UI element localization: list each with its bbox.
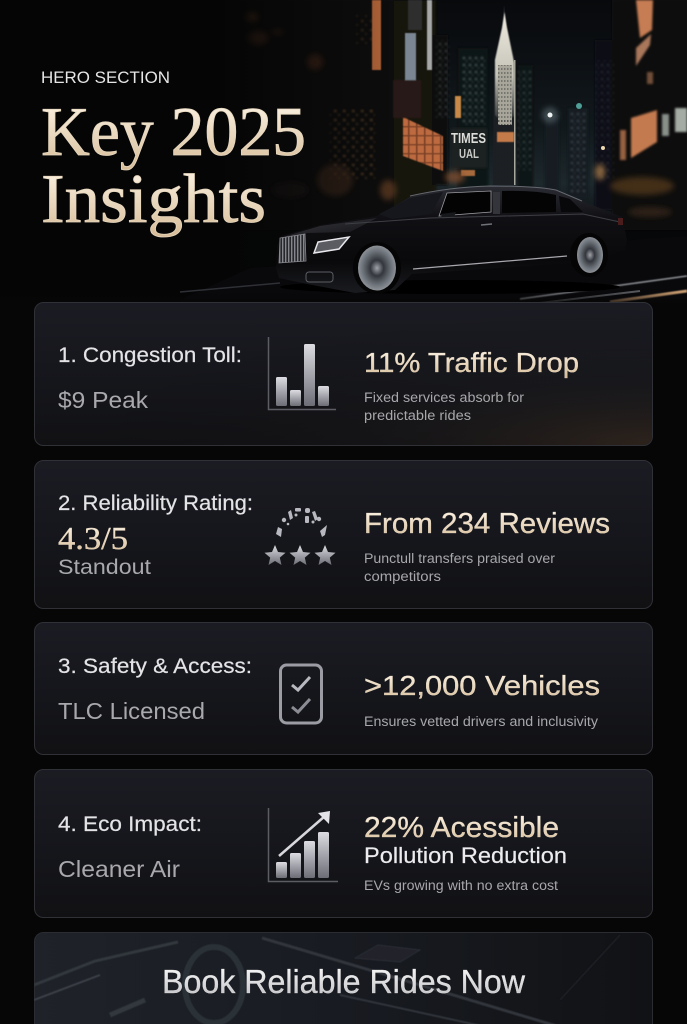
panel: eco impact: 4. Eco Impact: — [58, 813, 202, 836]
front wheel — [353, 242, 401, 294]
panel: reliability rating: 2. Reliability Rating: — [58, 492, 253, 515]
icon: three stars under arc — [264, 508, 336, 565]
panel: congestion toll: Fixed services absorb for — [364, 390, 525, 405]
icon: growth chart with arrow — [268, 808, 338, 882]
car trim highlights — [306, 186, 620, 282]
icon: bar chart — [268, 337, 336, 410]
car hood reflection — [283, 218, 377, 237]
rear wheel — [572, 233, 605, 273]
city skyline — [246, 0, 687, 230]
panel: safety and access — [34, 622, 652, 754]
times square sign: UAL — [459, 146, 479, 161]
lit building windows — [330, 15, 614, 192]
car grille — [279, 234, 306, 263]
panel: eco impact — [34, 770, 652, 918]
panel: congestion toll: predictable rides — [364, 408, 471, 423]
hero label: HERO SECTION — [41, 68, 170, 87]
times square sign: TIMES — [451, 130, 486, 147]
panel: eco impact: Pollution Reduction — [364, 843, 567, 868]
times square sign — [451, 128, 487, 176]
car interior background — [34, 935, 620, 1024]
road with light streaks — [180, 274, 687, 302]
glowing orange signs — [372, 0, 461, 171]
hero title — [41, 94, 306, 238]
hero title: Key 2025 — [41, 94, 306, 171]
panel: safety and access: >12,000 Vehicles — [364, 670, 600, 701]
panel: safety and access: 3. Safety & Access: — [58, 655, 252, 678]
panel: eco impact: EVs growing with no extra cost — [364, 878, 558, 893]
panel: congestion toll — [34, 302, 652, 446]
hero image: night city and limousine — [180, 0, 687, 302]
panel: reliability rating: 4.3/5 — [58, 520, 128, 556]
right side building lights — [620, 0, 687, 160]
blurred left lights — [247, 12, 324, 71]
panel: reliability rating: Punctull transfers praised over — [364, 551, 556, 566]
panel: reliability rating: competitors — [364, 569, 441, 584]
panel: call to action — [34, 932, 652, 1024]
car headlight — [314, 237, 349, 253]
limousine — [276, 186, 627, 294]
panel: congestion toll: 11% Traffic Drop — [364, 347, 579, 378]
panel: safety and access: TLC Licensed — [58, 698, 205, 724]
panel: congestion toll: 1. Congestion Toll: — [58, 344, 242, 367]
panel: eco impact: Cleaner Air — [58, 856, 180, 882]
street lamps — [542, 103, 605, 150]
street glows — [317, 164, 674, 217]
panel: call to action: Book Reliable Rides Now — [162, 963, 525, 1000]
panel: safety and access: Ensures vetted drivers and inclusivity — [364, 714, 598, 729]
panel: reliability rating: Standout — [58, 556, 151, 579]
panel: reliability rating: From 234 Reviews — [364, 508, 610, 540]
hero title: Insights — [41, 161, 266, 238]
panel: reliability rating — [34, 460, 652, 608]
panel: eco impact: 22% Acessible — [364, 812, 559, 844]
panel: congestion toll: $9 Peak — [58, 387, 149, 413]
empire tower — [493, 5, 516, 185]
car windows — [379, 191, 583, 219]
icon: checklist — [280, 665, 322, 723]
